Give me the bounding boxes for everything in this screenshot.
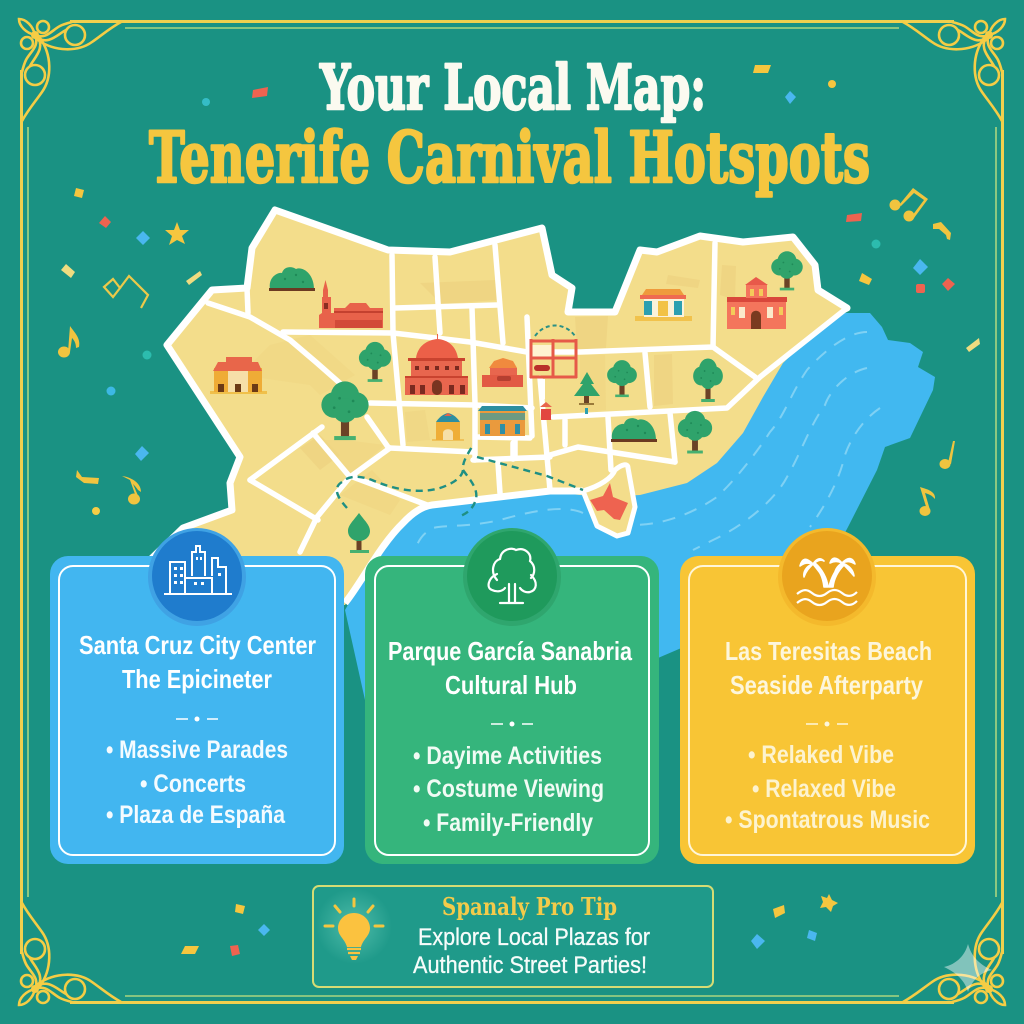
building: small yellow gate: [432, 413, 464, 441]
pine tree: [574, 372, 600, 414]
list: • Costume Viewing: [413, 775, 604, 803]
heading: Santa Cruz City Center: [79, 630, 316, 660]
music note lower left: [122, 476, 141, 504]
land: [100, 210, 847, 605]
list: • Spontatrous Music: [725, 806, 930, 834]
panel: Santa Cruz City Center: [50, 528, 344, 864]
house with teal shutters: [635, 289, 692, 321]
building: domed hall: [405, 334, 468, 395]
icon: tree: [463, 528, 561, 626]
tip text: Authentic Street Parties!: [413, 952, 647, 979]
icon: palm island: [778, 528, 876, 626]
music note left: [58, 326, 79, 358]
tip text: Spanaly Pro Tip: [442, 892, 617, 921]
coast outline: [150, 210, 847, 560]
music note right: [940, 441, 955, 469]
list: • Relaked Vibe: [748, 741, 894, 769]
list: [725, 741, 930, 834]
heading: Cultural Hub: [445, 670, 577, 700]
small red tower: [540, 402, 552, 420]
divider: [176, 718, 218, 720]
water dashes: [417, 332, 880, 550]
title: [149, 51, 870, 199]
list: • Dayime Activities: [413, 742, 602, 770]
water: [345, 313, 935, 700]
tip text: [413, 892, 650, 979]
panel: Parque García Sanabria: [365, 528, 659, 864]
building: teal and orange hall: [478, 406, 527, 436]
tip text: Explore Local Plazas for: [418, 924, 650, 951]
list: • Concerts: [140, 770, 246, 798]
list: • Plaza de España: [106, 801, 286, 829]
route dashes: [337, 444, 583, 517]
building: red church: [319, 280, 383, 328]
heading: Seaside Afterparty: [730, 670, 923, 700]
leaf tree: [348, 513, 370, 553]
land patches: [240, 265, 736, 515]
heading: Las Teresitas Beach: [725, 636, 932, 666]
music note lower right: [920, 487, 935, 516]
list: • Family-Friendly: [423, 809, 593, 837]
streets: [208, 243, 847, 552]
divider: [806, 723, 848, 725]
icon: city: [148, 528, 246, 626]
list: • Relaxed Vibe: [752, 775, 896, 803]
building: yellow palace: [210, 357, 267, 394]
list: [106, 736, 288, 829]
heading: [79, 630, 316, 694]
peninsula: [583, 465, 635, 536]
heading: [725, 636, 932, 700]
building: red villa: [727, 277, 787, 329]
bushes and trees: [269, 251, 803, 553]
watermark sparkle: [944, 944, 992, 992]
icon: light bulb: [316, 888, 392, 964]
heading: Parque García Sanabria: [388, 636, 632, 666]
map: [100, 210, 935, 700]
list: • Massive Parades: [106, 736, 288, 764]
outlined music note: [104, 276, 148, 308]
heading: [388, 636, 632, 700]
list: [413, 742, 604, 837]
title: Your Local Map:: [319, 51, 706, 124]
beamed music note right: [890, 188, 928, 222]
confetti and music notes: [58, 65, 980, 956]
divider: [491, 723, 533, 725]
heading: The Epicineter: [122, 664, 272, 694]
panel: Las Teresitas Beach: [680, 528, 975, 864]
building: small red hall: [482, 358, 523, 387]
callout: pro tip: [313, 886, 713, 987]
landmark: red gate with dashed arc: [530, 326, 577, 399]
